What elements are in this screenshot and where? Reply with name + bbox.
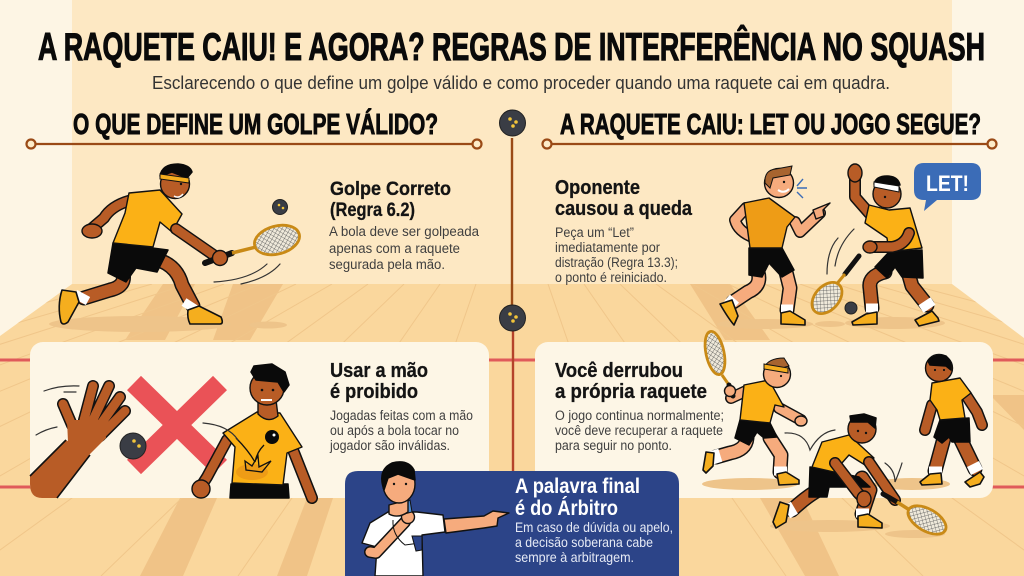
text: oponente causou a queda: Oponente — [555, 177, 640, 199]
text: oponente causou a queda: distração (Regra 13.3); — [555, 255, 678, 270]
central divider with balls — [500, 110, 526, 472]
text: você derrubou a própria raquete: a própria raquete — [555, 380, 707, 403]
text: usar a mão é proibido: ou após a bola tocar no — [330, 423, 459, 438]
text: usar a mão é proibido: Jogadas feitas com a mão — [330, 408, 473, 423]
illustration: runner with racket, player recovering racket, partner — [702, 330, 984, 540]
text: você derrubou a própria raquete: para seguir no ponto. — [555, 438, 672, 453]
text: usar a mão é proibido: é proibido — [330, 380, 418, 403]
text: usar a mão é proibido: Usar a mão — [330, 359, 428, 382]
illustration: referee blowing whistle and pointing — [362, 462, 509, 576]
text: oponente causou a queda — [555, 177, 693, 285]
text: callout copy: é do Árbitro — [515, 497, 618, 520]
text: golpe correto: segurada pela mão. — [329, 257, 445, 272]
subtitle: Esclarecendo o que define um golpe válido e como proceder quando uma raquete cai em quadra. — [152, 73, 890, 93]
heading: left section: O QUE DEFINE UM GOLPE VÁLIDO? — [73, 107, 438, 141]
text: callout copy: Em caso de dúvida ou apelo, — [515, 519, 673, 535]
text: golpe correto: (Regra 6.2) — [330, 200, 415, 221]
text: usar a mão é proibido — [329, 359, 473, 453]
text: você derrubou a própria raquete — [555, 359, 724, 453]
text: callout copy — [515, 475, 673, 565]
text: callout copy: a decisão soberana cabe — [515, 534, 653, 550]
right heading rule — [542, 140, 996, 148]
text: usar a mão é proibido: jogador são inválidas. — [329, 438, 450, 453]
third player — [920, 354, 984, 487]
illustration: player hitting correctly with racket — [49, 164, 303, 332]
fallen racket — [806, 229, 859, 319]
text: callout copy: A palavra final — [515, 475, 640, 498]
icon: red cross — [134, 383, 220, 467]
speech bubble: LET!: LET! — [926, 171, 969, 196]
text: golpe correto: A bola deve ser golpeada — [329, 224, 479, 239]
text: oponente causou a queda: Peça um “Let” — [555, 225, 634, 240]
left heading rule — [26, 140, 482, 148]
text: oponente causou a queda: causou a queda — [555, 198, 693, 220]
runner — [702, 330, 807, 485]
text: golpe correto: apenas com a raquete — [329, 241, 460, 256]
text: você derrubou a própria raquete: você deve recuperar a raquete — [555, 423, 723, 438]
text: você derrubou a própria raquete: O jogo continua normalmente; — [555, 408, 724, 423]
speech bubble: LET! — [914, 163, 981, 211]
illustration: opponent pushes, player calls let — [717, 164, 945, 329]
panel: using the hand is forbidden — [30, 342, 489, 498]
panel: you dropped your own racket — [535, 342, 993, 498]
text: callout copy: sempre à arbitragem. — [515, 549, 634, 565]
text: golpe correto: Golpe Correto — [330, 179, 451, 200]
text: golpe correto — [329, 179, 479, 272]
text: você derrubou a própria raquete: Você derrubou — [555, 359, 683, 382]
text: oponente causou a queda: imediatamente por — [555, 240, 660, 255]
dark player with headband — [848, 164, 939, 326]
pale player — [720, 166, 830, 325]
crouching player — [773, 414, 951, 540]
icon: hand hitting ball — [30, 386, 146, 498]
text: oponente causou a queda: o ponto é reiniciado. — [555, 270, 667, 285]
illustration: ball hits player body — [192, 364, 312, 498]
callout: referee has the final word — [345, 462, 679, 576]
